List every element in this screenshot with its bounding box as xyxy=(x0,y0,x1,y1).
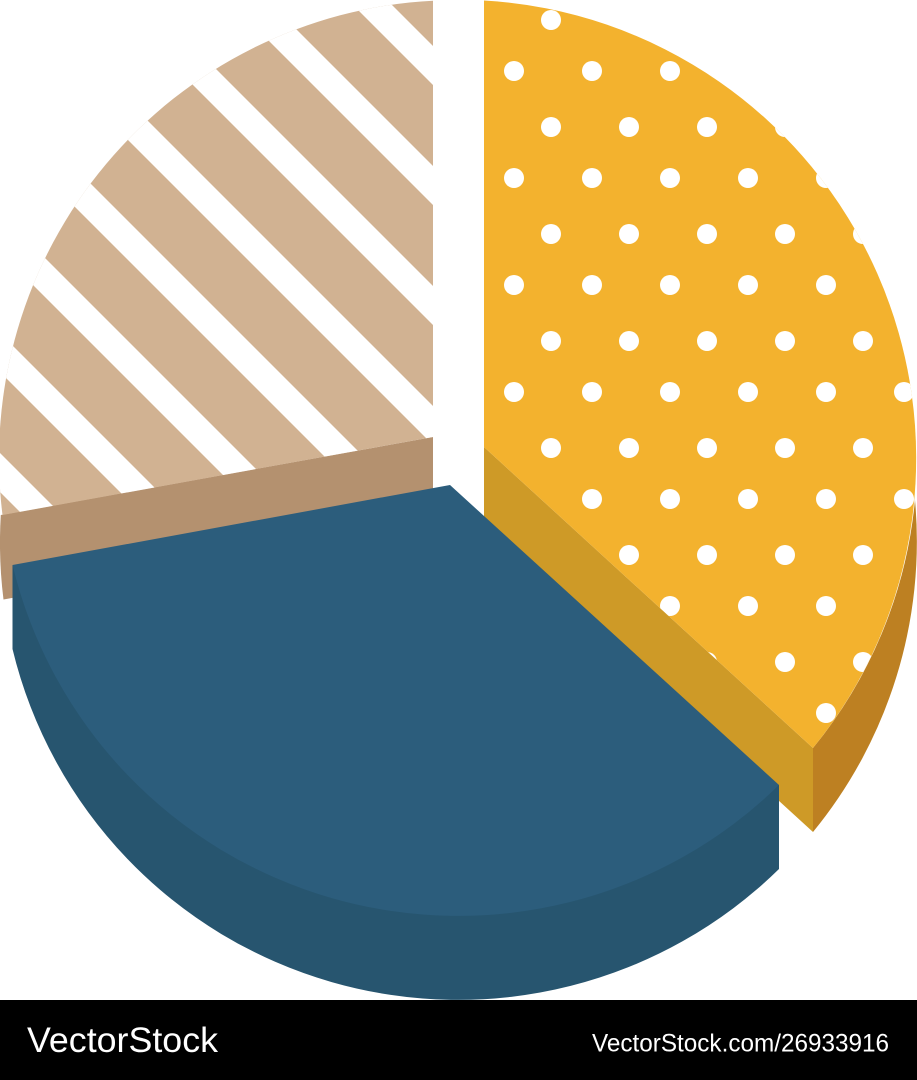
yellow slice outer side wall xyxy=(813,500,917,832)
footer brand name: VectorStock xyxy=(27,1021,219,1060)
tan slice side wall xyxy=(0,437,433,600)
slice: tan striped xyxy=(0,0,433,600)
footer image id: VectorStock.com/26933916 xyxy=(592,1030,889,1058)
footer bar xyxy=(0,1000,917,1080)
yellow slice top face with white dots xyxy=(484,0,917,760)
slice: blue xyxy=(12,485,779,1000)
slice: yellow dotted xyxy=(484,0,917,832)
tan slice top face with white diagonal stripes xyxy=(0,0,433,515)
yellow slice inner side wall xyxy=(484,447,813,832)
blue slice top face xyxy=(12,485,779,916)
blue slice side wall xyxy=(12,565,779,1000)
